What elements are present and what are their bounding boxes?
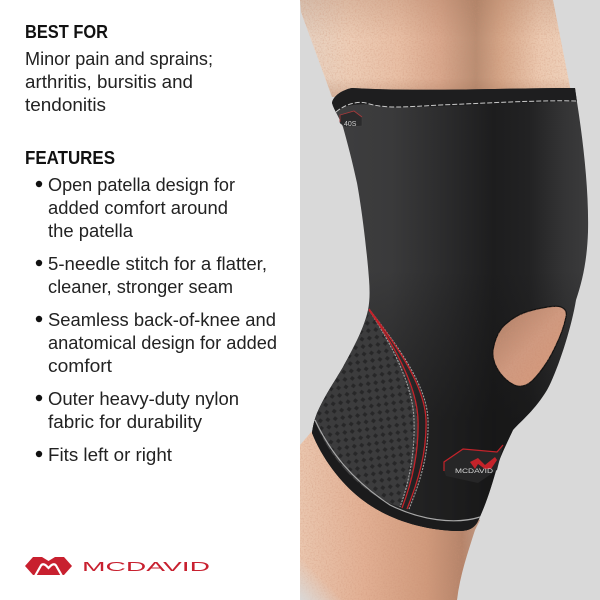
- brand logo: [25, 557, 210, 576]
- sleeve logo badge: MCDAVID: [455, 469, 494, 475]
- patella opening: [492, 306, 567, 387]
- calf skin: [300, 430, 480, 600]
- feature: outer fabric: Outer heavy-duty nylon: [48, 389, 239, 409]
- feature: seamless: comfort: [48, 356, 112, 376]
- panel: product text: [25, 22, 277, 465]
- feature: open patella: [36, 175, 235, 241]
- feature: seamless: anatomical design for added: [48, 333, 277, 353]
- thigh skin: [300, 0, 575, 97]
- red and grey seam stitching: [369, 310, 414, 507]
- feature: fits: Fits left or right: [48, 445, 172, 465]
- feature list: [36, 175, 277, 465]
- text block: best for: [25, 49, 213, 115]
- text block: best for: Minor pain and sprains;: [25, 49, 213, 69]
- text block: best for: tendonitis: [25, 95, 106, 115]
- icon: M mark: [25, 557, 72, 576]
- feature: outer fabric: [36, 389, 239, 432]
- panel: product photo: [300, 0, 600, 600]
- wordmark: MCDAVID: [82, 559, 210, 574]
- feature: seamless: [36, 310, 277, 376]
- small size badge: 40S: [344, 121, 357, 128]
- feature: outer fabric: fabric for durability: [48, 412, 202, 432]
- knee sleeve: [312, 88, 588, 531]
- heading: best for: BEST FOR: [25, 22, 108, 42]
- feature: open patella: added comfort around: [48, 198, 228, 218]
- feature: open patella: the patella: [48, 221, 134, 241]
- heading: features: FEATURES: [25, 148, 115, 168]
- bottom cuff: [312, 420, 480, 531]
- feature: open patella: Open patella design for: [48, 175, 235, 195]
- feature: seamless: Seamless back-of-knee and: [48, 310, 276, 330]
- feature: 5-needle stitch: [36, 254, 267, 297]
- text block: best for: arthritis, bursitis and: [25, 72, 193, 92]
- sleeve logo badge: [443, 445, 503, 483]
- mesh panel: [316, 315, 418, 507]
- top cuff: [332, 88, 577, 112]
- feature: 5-needle stitch: 5-needle stitch for a flatter,: [48, 254, 267, 274]
- small size badge: [340, 111, 362, 128]
- feature: 5-needle stitch: cleaner, stronger seam: [48, 277, 233, 297]
